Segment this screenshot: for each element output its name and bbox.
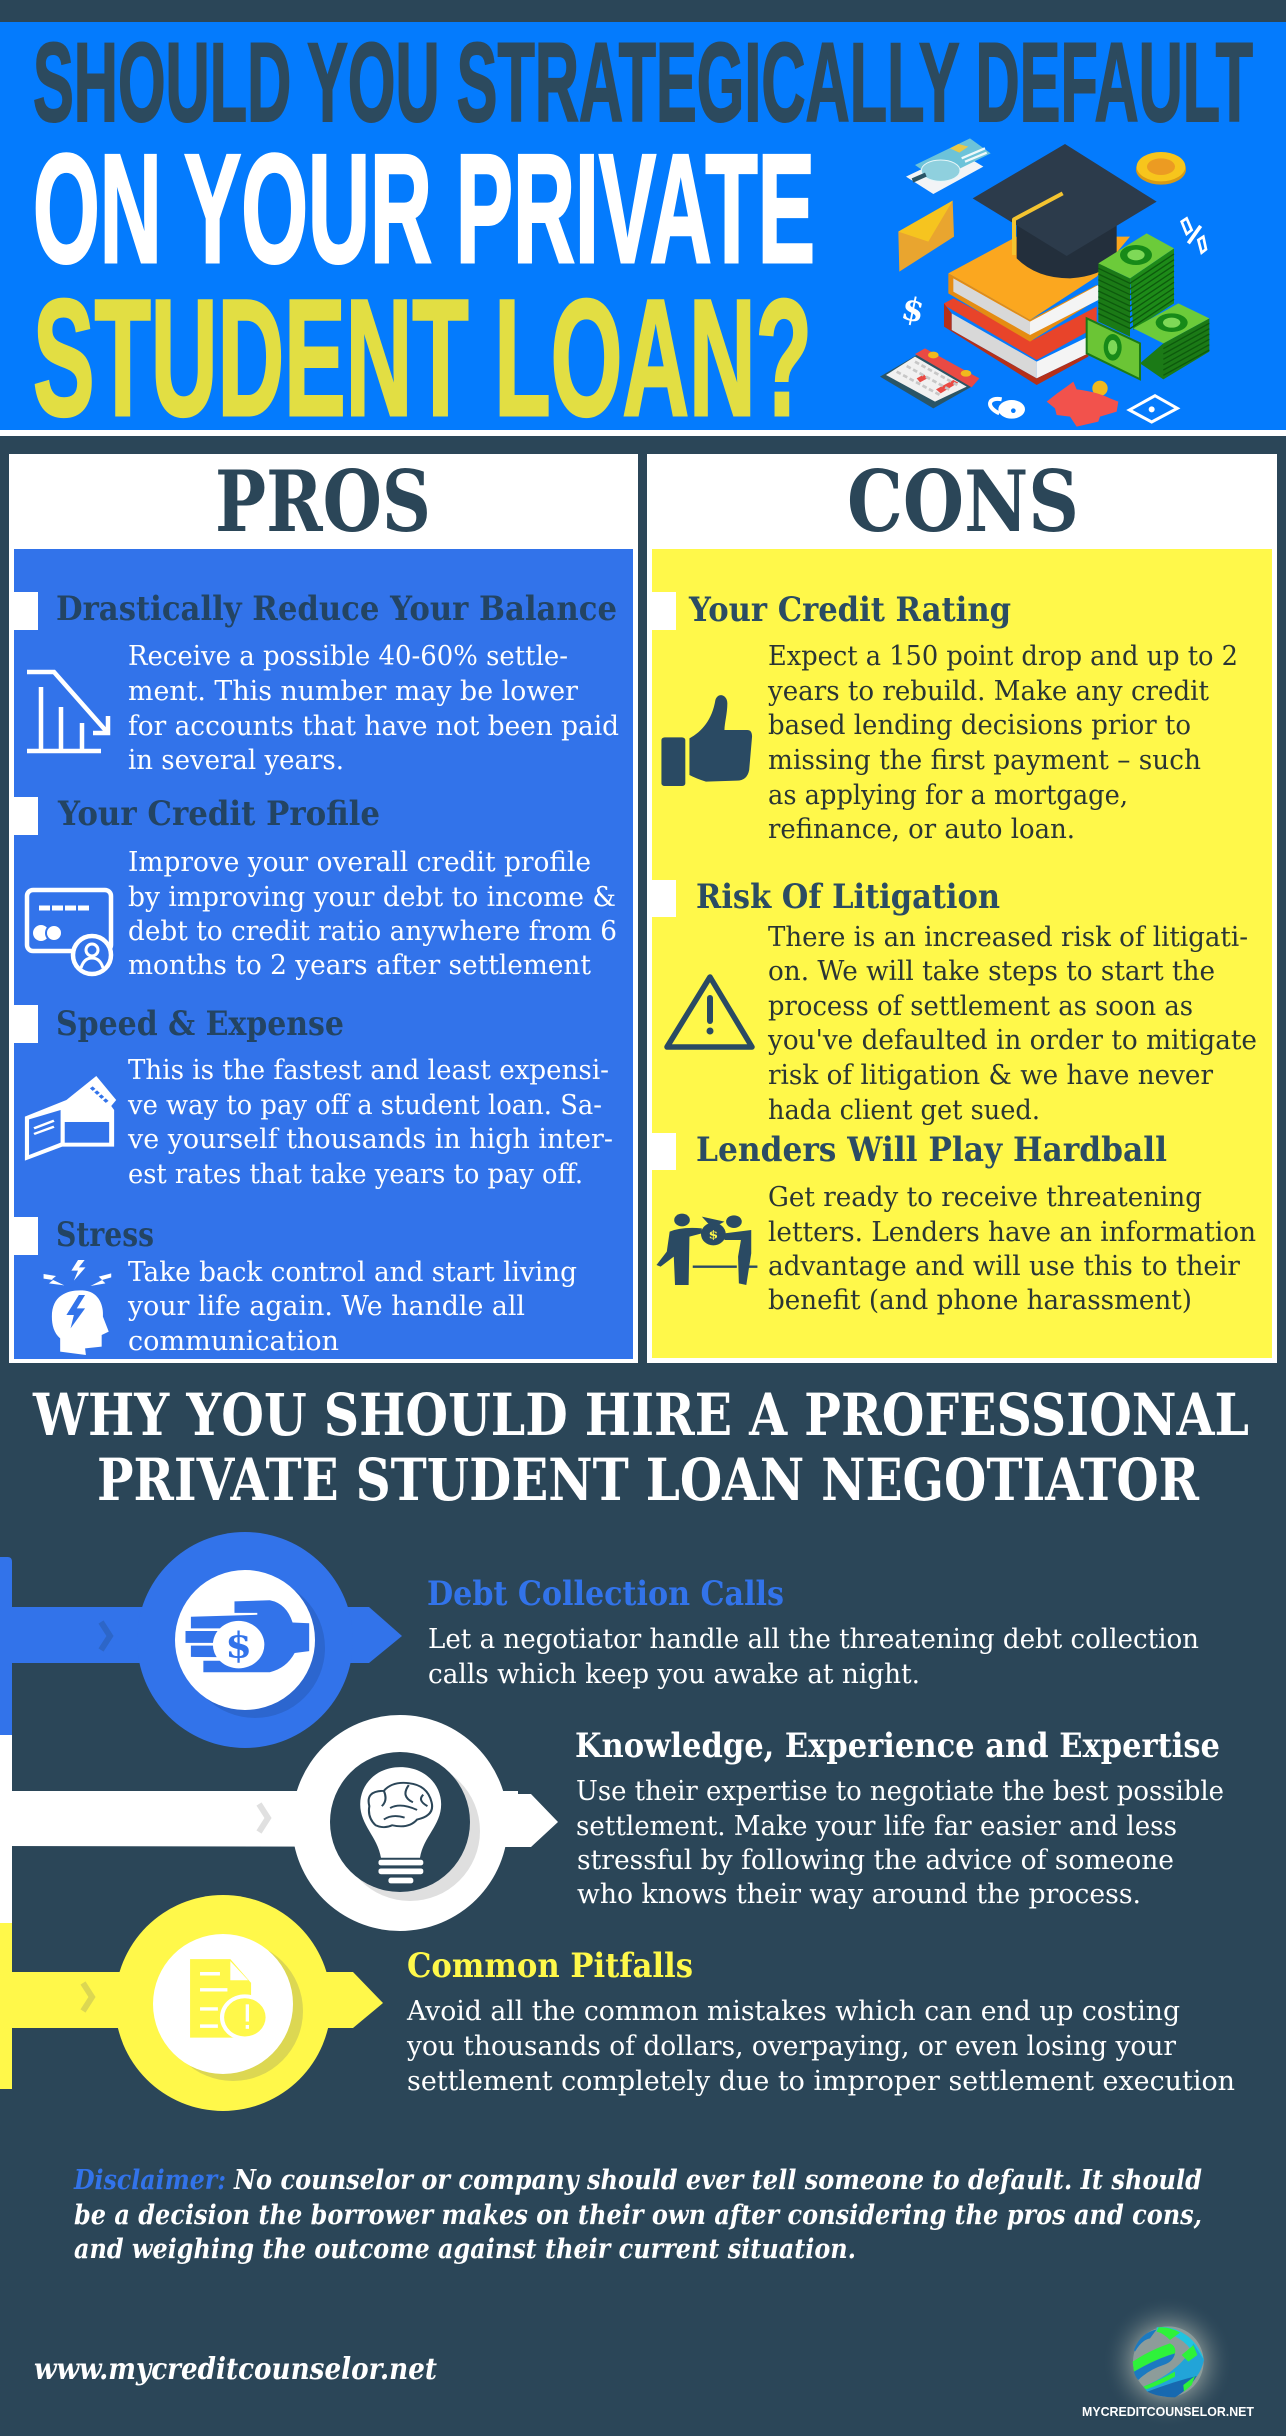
cons item: hardball: advantage and will use this to their	[768, 1251, 1240, 1282]
pros item: stress: your life again. We handle all	[127, 1291, 525, 1322]
cons item: credit rating: refinance, or auto loan.	[768, 814, 1075, 845]
icon: people exchanging money: $	[708, 1229, 718, 1242]
text block: Avoid all the common mistakes which can end up costing	[406, 1996, 1180, 2027]
icon: red book	[944, 298, 1097, 385]
text block	[406, 1996, 1235, 2097]
text block	[428, 1624, 1199, 1690]
panel: cons	[647, 452, 1277, 1363]
pros item: credit profile: debt to credit ratio anywhere from 6	[128, 916, 617, 947]
text block: Let a negotiator handle all the threatening debt collection	[428, 1624, 1199, 1655]
pros item: speed and expense: Speed & Expense	[56, 1004, 344, 1044]
heading: Knowledge, Experience and Expertise	[575, 1726, 1220, 1766]
icon: envelope	[898, 201, 954, 272]
cons item: litigation	[652, 877, 1257, 1126]
disclaimer: Disclaimer:	[73, 2165, 226, 2196]
icon: graduation cap	[973, 144, 1157, 278]
icon: credit card	[906, 138, 991, 194]
icon: orange book	[948, 237, 1130, 342]
logo	[1082, 2296, 1254, 2428]
icon: calendar	[880, 348, 979, 408]
pros item: stress: communication	[128, 1326, 339, 1357]
icon: people exchanging money	[656, 1214, 757, 1285]
cons item: litigation: process of settlement as soon as	[768, 991, 1193, 1022]
icon: striped globe	[1133, 2326, 1204, 2397]
text block: who knows their way around the process.	[577, 1879, 1141, 1910]
cons item: litigation: you've defaulted in order to mitigate	[767, 1025, 1257, 1056]
pros item: reduce balance: ment. This number may be lower	[128, 676, 578, 707]
text block: calls which keep you awake at night.	[428, 1659, 920, 1690]
disclaimer: and weighing the outcome against their current situation.	[74, 2234, 856, 2265]
title	[33, 20, 1253, 451]
pros item: reduce balance	[14, 589, 619, 776]
heading: why hire a negotiator	[32, 1381, 1249, 1514]
header banner	[0, 20, 1286, 451]
text block: settlement completely due to improper settlement execution	[407, 2066, 1235, 2097]
text block: settlement. Make your life far easier and less	[576, 1811, 1177, 1842]
cons item: litigation: risk of litigation & we have never	[768, 1060, 1213, 1091]
text block: stressful by following the advice of someone	[577, 1845, 1174, 1876]
pros item: credit profile	[14, 794, 617, 981]
step: common pitfalls	[0, 1895, 1235, 2111]
pros item: stress	[14, 1215, 577, 1357]
icon: lightbulb with brain	[360, 1767, 441, 1883]
website url: www.mycreditcounselor.net	[34, 2352, 437, 2387]
cons item: credit rating: years to rebuild. Make any credit	[767, 676, 1209, 707]
pros item: reduce balance: in several years.	[128, 745, 344, 776]
cons item: credit rating	[652, 590, 1238, 845]
pros item: reduce balance: for accounts that have not been paid	[128, 711, 619, 742]
icon: hand with coin: $	[225, 1625, 252, 1666]
icon: coin	[1136, 152, 1186, 185]
arrow and circle: white	[0, 1715, 558, 1931]
icon: hand with coin	[185, 1600, 309, 1672]
heading: Debt Collection Calls	[427, 1574, 784, 1614]
text block: Use their expertise to negotiate the best possible	[576, 1776, 1224, 1807]
icon: diamond badge	[1129, 396, 1177, 422]
icon: dollar sign: $	[898, 289, 928, 331]
cons item: litigation: on. We will take steps to start the	[768, 956, 1215, 987]
pros item: speed and expense	[14, 1004, 613, 1190]
icon: wallet	[25, 1076, 116, 1161]
heading: PROS: PROS	[215, 452, 431, 551]
cons item: credit rating: based lending decisions prior to	[768, 710, 1191, 741]
pros item: stress: Stress	[56, 1215, 154, 1255]
logo wordmark: MYCREDITCOUNSELOR.NET	[1082, 2404, 1254, 2419]
icon: warning triangle	[667, 977, 752, 1047]
cons item: hardball: Lenders Will Play Hardball	[696, 1130, 1167, 1170]
cons item: hardball	[652, 1130, 1256, 1316]
pros item: reduce balance: Drastically Reduce Your Balance	[56, 589, 617, 629]
cons item: hardball: Get ready to receive threatening	[768, 1182, 1202, 1213]
cons item: litigation: Risk Of Litigation	[696, 877, 1000, 917]
pros item: speed and expense: This is the fastest and least expensi-	[128, 1055, 609, 1086]
cons item: litigation: There is an increased risk of litigati-	[768, 922, 1248, 953]
timeline bar	[0, 1557, 12, 2089]
pros item: credit profile: by improving your debt to income &	[128, 882, 616, 913]
cons item: credit rating: missing the first payment – such	[768, 745, 1201, 776]
cons item: credit rating: as applying for a mortgage,	[768, 780, 1128, 811]
icon: stressed head	[44, 1260, 111, 1355]
step: knowledge, experience and expertise	[0, 1715, 1224, 1931]
cons item: hardball: letters. Lenders have an information	[768, 1217, 1256, 1248]
icon: document with alert	[190, 1959, 270, 2040]
icon: declining chart	[27, 672, 108, 751]
disclaimer	[73, 2165, 1202, 2265]
pros item: credit profile: months to 2 years after settlement	[128, 950, 591, 981]
cons item: litigation: hada client get sued.	[768, 1095, 1040, 1126]
icon: percent sign	[1182, 218, 1206, 253]
icon: piggy bank	[1047, 381, 1118, 427]
step: debt collection calls	[0, 1532, 1199, 1748]
panel: pros	[9, 452, 638, 1363]
pros item: credit profile: Improve your overall credit profile	[128, 847, 591, 878]
icon: money stacks	[1087, 233, 1209, 379]
pros item: stress: Take back control and start living	[128, 1257, 577, 1288]
cons item: credit rating: Expect a 150 point drop and up to 2	[768, 641, 1238, 672]
icon: credit card user	[27, 890, 111, 974]
text block	[576, 1776, 1224, 1910]
icon: thumbs up	[661, 695, 752, 786]
pros item: speed and expense: est rates that take years to pay off.	[128, 1159, 583, 1190]
pros item: credit profile: Your Credit Profile	[57, 794, 380, 834]
pros item: speed and expense: ve yourself thousands in high inter-	[127, 1124, 613, 1155]
text block: you thousands of dollars, overpaying, or even losing your	[406, 2031, 1176, 2062]
cons item: hardball: benefit (and phone harassment)	[768, 1285, 1192, 1316]
cons item: credit rating: Your Credit Rating	[688, 590, 1011, 630]
heading: CONS: CONS	[847, 452, 1079, 551]
pros item: reduce balance: Receive a possible 40-60% settle-	[128, 641, 568, 672]
pros item: speed and expense: ve way to pay off a student loan. Sa-	[127, 1090, 602, 1121]
arrow and circle: yellow	[0, 1895, 383, 2111]
icon: padlock	[990, 399, 1025, 419]
illustration: graduation cap, books and money	[880, 138, 1209, 427]
arrow and circle: blue	[0, 1532, 402, 1748]
heading: Common Pitfalls	[407, 1946, 693, 1986]
